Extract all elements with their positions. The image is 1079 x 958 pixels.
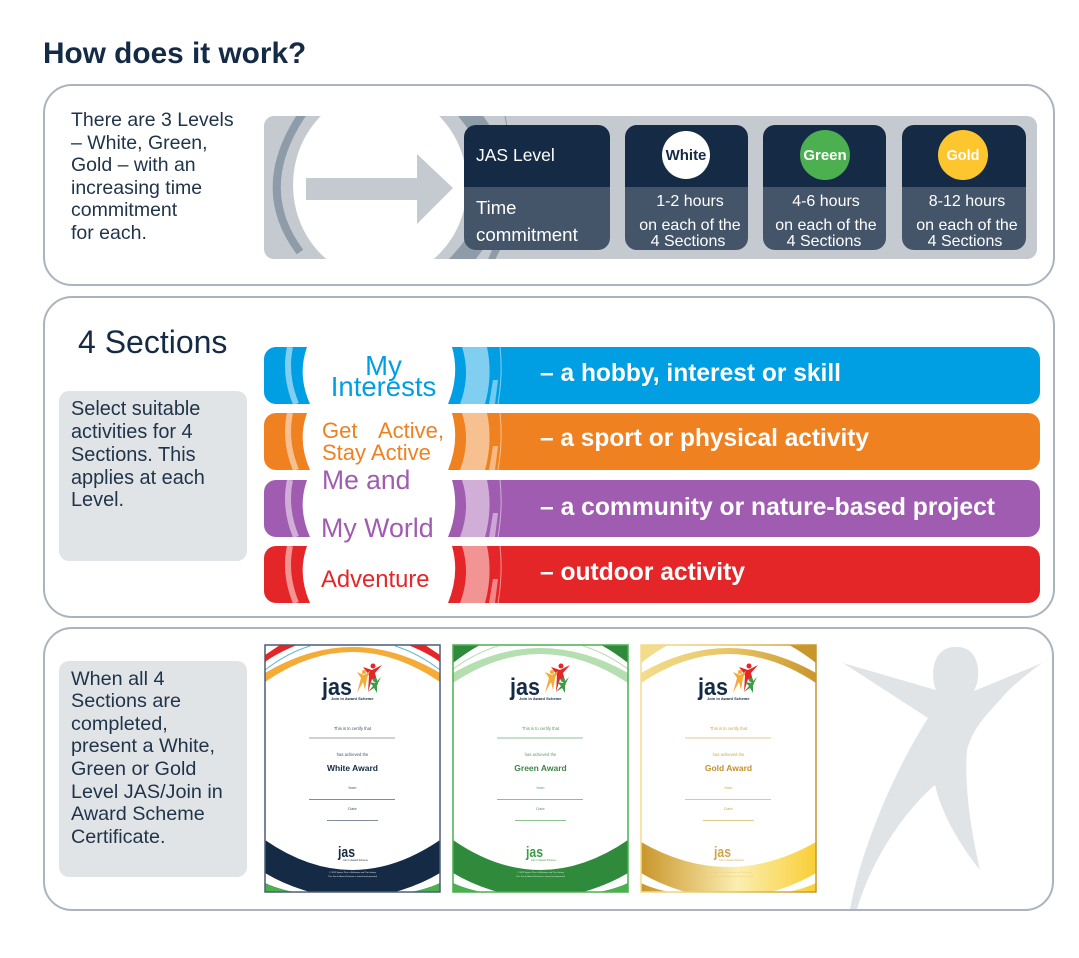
certificate: gold award: Gold Award bbox=[705, 763, 752, 773]
section bar: Me and My World: My World bbox=[321, 513, 434, 543]
table: white level: White bbox=[666, 147, 706, 164]
callout: select activities: Level. bbox=[71, 489, 124, 511]
level graphic background bbox=[264, 116, 1037, 259]
certificate: white award: has achieved the bbox=[337, 752, 369, 757]
panel: levels bbox=[44, 85, 1054, 285]
table: row headers: commitment bbox=[476, 224, 579, 245]
certificate: white award: The Join In Award Scheme is owned and operated bbox=[328, 875, 378, 878]
table: green level: Green bbox=[803, 147, 847, 164]
certificate: gold award: Join In Award Scheme bbox=[719, 859, 744, 862]
certificate: green award: Green Award bbox=[514, 763, 567, 773]
callout: present certificate: Certificate. bbox=[71, 826, 166, 848]
callout: select activities: Sections. This bbox=[71, 444, 196, 466]
section bar: My Interests bbox=[264, 347, 1040, 404]
panel: certificates bbox=[44, 628, 1053, 910]
certificate: green award: Join in Award Scheme bbox=[519, 696, 562, 701]
table: row headers: Time bbox=[476, 197, 516, 218]
heading: 4 Sections: 4 Sections bbox=[78, 324, 227, 360]
certificate: green award: Join In Award Scheme bbox=[531, 859, 556, 862]
text: levels intro: There are 3 Levels bbox=[71, 109, 234, 131]
callout: present certificate: When all 4 bbox=[71, 668, 164, 690]
section bar: Me and My World: Me and bbox=[322, 465, 410, 495]
certificate: white award: from bbox=[348, 785, 357, 790]
callout: select activities: activities for 4 bbox=[71, 421, 193, 443]
certificate: green award: The Join In Award Scheme is owned and operated bbox=[516, 875, 566, 878]
certificate: gold award: Date bbox=[724, 806, 733, 811]
certificate: gold award bbox=[641, 645, 816, 892]
section bar: Get Active, Stay Active: – a sport or physical activity bbox=[540, 424, 869, 452]
certificate: green award: from bbox=[536, 785, 545, 790]
certificate: white award: © 2022 Sports Plus in Reflexion and The Lottery bbox=[329, 871, 377, 874]
table: gold level bbox=[902, 125, 1026, 250]
icon: large figure silhouette bbox=[843, 647, 1042, 909]
certificate: gold award: jas bbox=[713, 844, 731, 861]
callout: present certificate: Green or Gold bbox=[71, 758, 196, 780]
table: gold level: Gold bbox=[946, 148, 980, 164]
section bar: Adventure bbox=[264, 546, 1040, 603]
text: levels intro: – White, Green, bbox=[71, 132, 208, 154]
certificate: white award: White Award bbox=[327, 763, 378, 773]
section bar: My Interests: – a hobby, interest or skill bbox=[540, 359, 841, 387]
section bar: Adventure: Adventure bbox=[321, 566, 429, 593]
table: white level: on each of the bbox=[639, 217, 741, 234]
section bar: My Interests: Interests bbox=[331, 371, 436, 402]
certificate: white award: Join in Award Scheme bbox=[331, 696, 374, 701]
certificate: gold award: jas bbox=[697, 674, 728, 701]
section bar: My Interests: My bbox=[365, 350, 402, 381]
certificate: green award bbox=[453, 645, 628, 892]
callout: present certificate: Award Scheme bbox=[71, 803, 205, 825]
callout: present certificate: present a White, bbox=[71, 735, 215, 757]
table: gold level: 8-12 hours bbox=[929, 193, 1005, 210]
callout: select activities bbox=[59, 391, 247, 561]
certificate: gold award: Join in Award Scheme bbox=[707, 696, 750, 701]
table: green level: on each of the bbox=[775, 217, 877, 234]
text: levels intro: Gold – with an bbox=[71, 154, 196, 176]
callout: present certificate: Sections are bbox=[71, 690, 181, 712]
section bar: Get Active, Stay Active: Get bbox=[322, 418, 357, 443]
table: white level bbox=[625, 125, 748, 250]
callout: select activities: applies at each bbox=[71, 467, 205, 489]
certificate: green award: Date bbox=[536, 806, 545, 811]
table: green level: 4-6 hours bbox=[792, 193, 860, 210]
section bar: Get Active, Stay Active: Stay Active bbox=[322, 440, 431, 465]
table: green level: 4 Sections bbox=[787, 233, 861, 250]
callout: select activities: Select suitable bbox=[71, 398, 200, 420]
certificate: white award: Join In Award Scheme bbox=[343, 859, 368, 862]
text: levels intro: increasing time bbox=[71, 177, 202, 199]
table: row headers bbox=[464, 125, 610, 250]
certificate: gold award: has achieved the bbox=[713, 752, 745, 757]
certificate: white award: jas bbox=[321, 674, 352, 701]
certificate: green award: This is to certify that bbox=[522, 726, 560, 731]
table: gold level: on each of the bbox=[916, 217, 1018, 234]
text: levels intro: for each. bbox=[71, 222, 147, 244]
callout: present certificate bbox=[59, 661, 247, 877]
section bar: Me and My World bbox=[264, 465, 1040, 543]
callout: present certificate: completed, bbox=[71, 713, 168, 735]
title: How does it work? bbox=[43, 37, 306, 70]
certificate: white award: This is to certify that bbox=[334, 726, 372, 731]
text: levels intro: commitment bbox=[71, 199, 178, 221]
table: row headers: JAS Level bbox=[476, 145, 555, 165]
table: white level: 1-2 hours bbox=[656, 193, 724, 210]
section bar: Get Active, Stay Active bbox=[264, 413, 1040, 470]
certificate: green award: has achieved the bbox=[525, 752, 557, 757]
section bar: Get Active, Stay Active: Active, bbox=[378, 418, 444, 443]
certificate: gold award: The Join In Award Scheme is owned and operated bbox=[704, 875, 754, 878]
table: gold level: 4 Sections bbox=[928, 233, 1002, 250]
panel: 4 sections bbox=[44, 297, 1054, 617]
section bar: Adventure: – outdoor activity bbox=[540, 558, 745, 586]
certificate: green award: jas bbox=[509, 674, 540, 701]
callout: present certificate: Level JAS/Join in bbox=[71, 781, 223, 803]
certificate: gold award: © 2022 Sports Plus in Reflexion and The Lottery bbox=[705, 871, 753, 874]
certificate: green award: © 2022 Sports Plus in Reflexion and The Lottery bbox=[517, 871, 565, 874]
table: green level bbox=[763, 125, 886, 250]
section bar: Me and My World: – a community or nature-based project bbox=[540, 493, 996, 521]
certificate: gold award: from bbox=[724, 785, 733, 790]
table: white level: 4 Sections bbox=[651, 233, 725, 250]
certificate: white award bbox=[265, 645, 440, 892]
certificate: green award: jas bbox=[525, 844, 543, 861]
icon: arrow bbox=[306, 154, 453, 224]
certificate: gold award: This is to certify that bbox=[710, 726, 748, 731]
certificate: white award: Date bbox=[348, 806, 357, 811]
certificate: white award: jas bbox=[337, 844, 355, 861]
